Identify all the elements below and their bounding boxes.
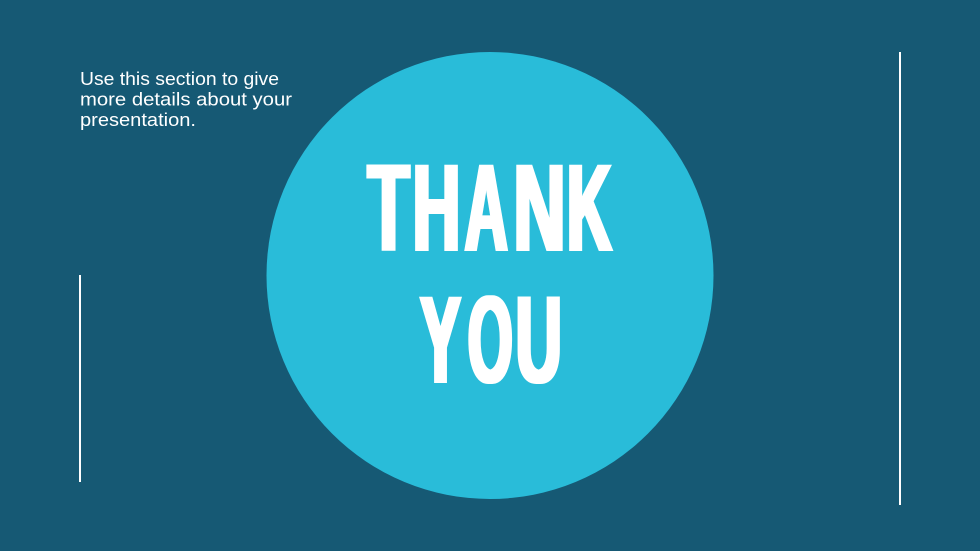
slide: K (567, 139, 612, 278)
title: thank you: O (468, 271, 512, 410)
right vertical line (899, 52, 901, 505)
text block: details: more details about your (80, 90, 292, 110)
text block: details: presentation. (80, 110, 196, 130)
title: thank you: N (514, 139, 566, 278)
title: thank you: T (368, 139, 410, 278)
circle (266, 52, 714, 499)
title: thank you: H (413, 139, 460, 278)
title: thank you (368, 139, 612, 410)
text block: details (80, 69, 292, 130)
title: thank you: A (465, 139, 508, 278)
left vertical line (79, 275, 81, 482)
title: thank you: Y (420, 271, 461, 410)
title: thank you: U (516, 271, 562, 410)
text block: details: Use this section to give (80, 69, 279, 89)
